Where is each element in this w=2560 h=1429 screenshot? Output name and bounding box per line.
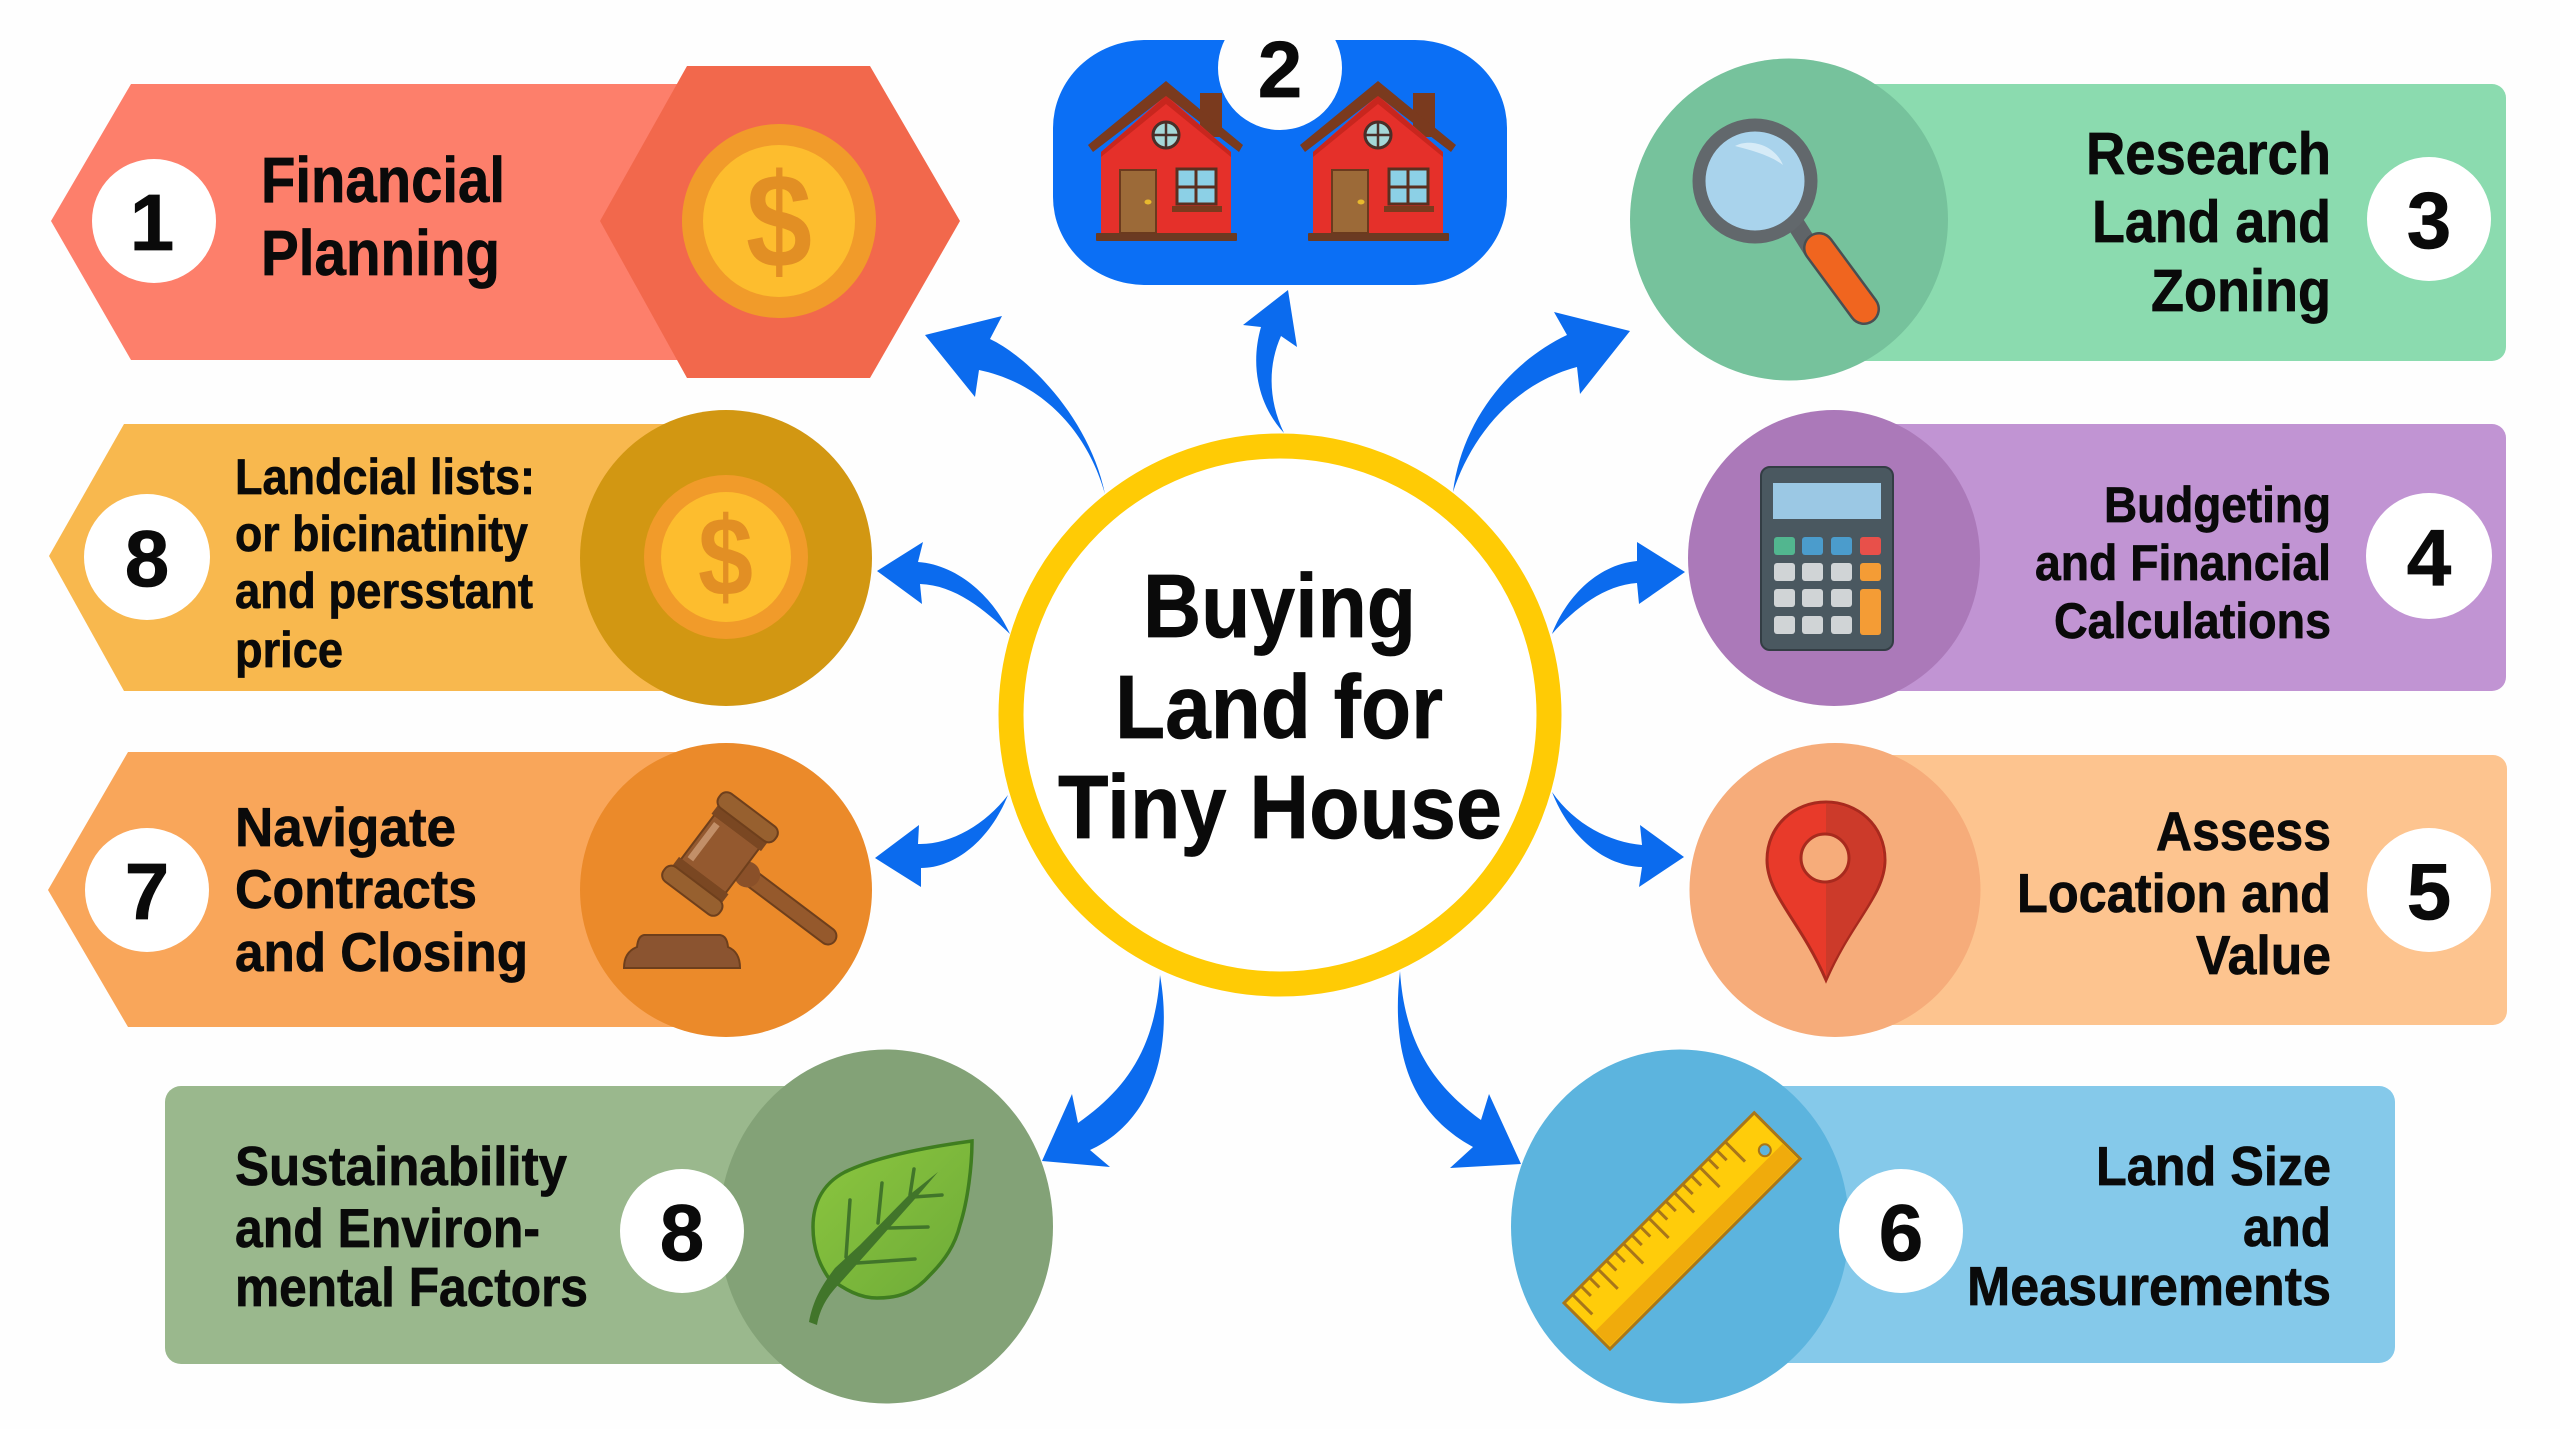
label: or bicinatinity (235, 506, 528, 562)
label: mental Factors (235, 1256, 588, 1318)
icon circle (1690, 743, 1980, 1037)
label: Value (2196, 924, 2331, 986)
label: price (235, 622, 343, 678)
panel 5: Assess Location and Value (1690, 743, 2507, 1037)
number badge 6 (1839, 1169, 1963, 1293)
arrow: to panel 3 (1453, 312, 1630, 492)
number badge 5 (2367, 828, 2491, 952)
number badge 8 (84, 494, 210, 620)
icon circle (1511, 1050, 1849, 1404)
icon: gavel (624, 789, 868, 985)
label (2035, 477, 2331, 649)
label: Location and (2017, 862, 2331, 924)
icon circle (1630, 58, 1948, 380)
label: Planning (261, 217, 500, 289)
icon circle (1688, 410, 1980, 706)
arrow: to panel 6 (1398, 971, 1521, 1168)
icon: right house (1300, 81, 1456, 241)
label: Contracts (235, 858, 477, 920)
title (1058, 557, 1502, 858)
icon: magnifier (1699, 125, 1864, 309)
number badge 8: 8 (125, 514, 169, 603)
number badge 3 (2367, 157, 2491, 281)
icon: location pin (1767, 802, 1885, 980)
number badge 7 (85, 828, 209, 952)
panel 7: Navigate Contracts and Closing (48, 743, 872, 1037)
panel 1: Financial Planning (51, 66, 960, 378)
panel 8 green: Sustainability (165, 1050, 1053, 1404)
label (235, 1135, 588, 1318)
label: Navigate (235, 796, 456, 858)
panel 4: Budgeting and Financial Calculations (1688, 410, 2506, 706)
label (1967, 1135, 2331, 1317)
label (235, 796, 528, 983)
label: and persstant (235, 563, 533, 619)
arrow: to panel 7 (875, 795, 1008, 887)
number badge 2 (1218, 6, 1342, 130)
label (235, 449, 535, 678)
icon: ruler (1564, 1113, 1800, 1349)
number badge 8 (620, 1169, 744, 1293)
label (261, 144, 505, 289)
title: Buying (1143, 557, 1416, 657)
number badge 4 (2366, 493, 2492, 619)
label: and Closing (235, 921, 528, 983)
panel 2: houses (1053, 6, 1507, 285)
label: Zoning (2151, 258, 2331, 324)
number badge 2: 2 (1258, 25, 1302, 114)
number badge 1: 1 (130, 178, 174, 267)
icon: left house (1088, 81, 1243, 241)
number badge 7: 7 (125, 847, 169, 936)
number badge 8: 8 (660, 1188, 704, 1277)
label: Sustainability (235, 1135, 567, 1197)
number badge 6: 6 (1879, 1188, 1923, 1277)
label: Land and (2092, 189, 2331, 255)
icon circle (719, 1050, 1053, 1404)
title: Tiny House (1058, 758, 1502, 858)
central circle with title (1011, 446, 1549, 984)
icon: coin: $ (698, 494, 753, 619)
label (2086, 121, 2331, 324)
number badge 4: 4 (2407, 513, 2452, 602)
arrow: to panel 8 green (1042, 975, 1164, 1167)
arrow: to panel 8 amber (877, 542, 1010, 634)
icon circle (580, 743, 872, 1037)
label: Measurements (1967, 1255, 2331, 1317)
icon: leaf (809, 1141, 972, 1325)
label: Land Size (2096, 1135, 2331, 1197)
label: Budgeting (2104, 477, 2331, 533)
label: Assess (2156, 800, 2331, 862)
hexagon behind coin (600, 66, 960, 378)
number badge 3: 3 (2407, 176, 2451, 265)
label: Landcial lists: (235, 449, 535, 505)
label: and Environ- (235, 1197, 540, 1259)
label: and (2243, 1196, 2331, 1258)
label: Research (2086, 121, 2331, 187)
arrow: to panel 1 (925, 316, 1105, 494)
arrow: to panel 5 (1552, 792, 1684, 887)
panel 8 amber: Landcial lists (49, 410, 872, 706)
label (2017, 800, 2331, 986)
label: Financial (261, 144, 505, 216)
arrow: to panel 4 (1552, 542, 1685, 634)
icon: coin (644, 475, 808, 639)
panel 6: Land Size and Measurements (1511, 1050, 2395, 1404)
number badge 1 (92, 159, 216, 283)
label: and Financial (2035, 535, 2331, 591)
arrow: to panel 2 (1243, 290, 1297, 433)
icon circle (580, 410, 872, 706)
panel 3: Research Land and Zoning (1630, 58, 2506, 380)
label: Calculations (2054, 593, 2331, 649)
title: Land for (1115, 658, 1443, 758)
icon: coin (682, 124, 876, 318)
icon: calculator (1761, 467, 1893, 650)
icon: coin: $ (746, 147, 812, 296)
number badge 5: 5 (2407, 847, 2451, 936)
